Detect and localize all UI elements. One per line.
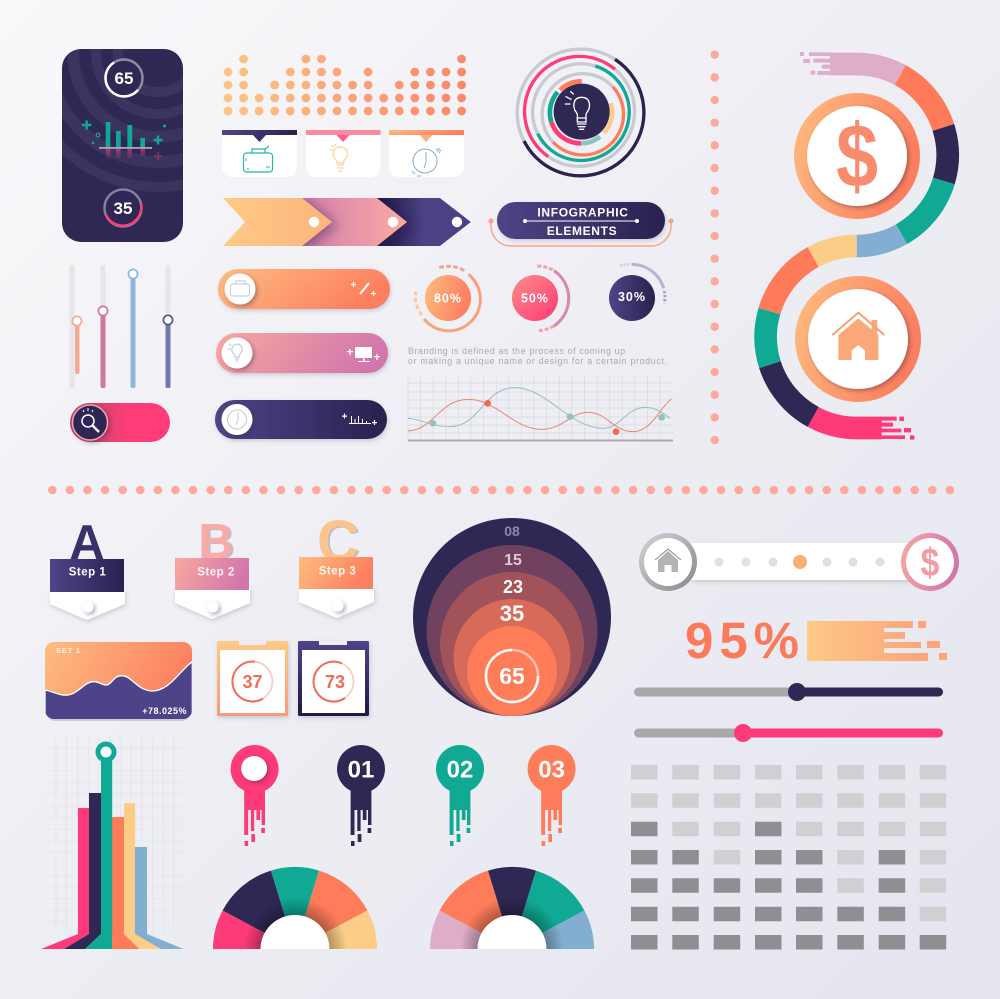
title pill: infographic elements: ELEMENTS bbox=[547, 224, 617, 238]
title pill: infographic elements: INFOGRAPHIC bbox=[537, 206, 629, 220]
icon: dollar badge: $ bbox=[921, 540, 940, 585]
clipboard: 73: 73 bbox=[325, 672, 345, 692]
icon: monitor with sparkles bbox=[347, 347, 380, 362]
semicircle gauge: right bbox=[430, 867, 594, 949]
bar chart with grid and ringed teal bar bbox=[41, 737, 184, 949]
gauge: 50%: 50% bbox=[521, 292, 549, 306]
step card A: A bbox=[69, 516, 105, 570]
gauge: 30%: 30% bbox=[618, 290, 646, 304]
tab card: briefcase bbox=[222, 130, 297, 177]
house medallion bbox=[795, 276, 921, 402]
gauge: 50% bbox=[512, 266, 569, 331]
bar with speed lines bbox=[807, 621, 928, 661]
nested circles chart: 23 bbox=[503, 577, 523, 597]
semicircle gauge: left bbox=[213, 867, 377, 949]
drip pin: 01: 01 bbox=[348, 756, 374, 784]
wave area card bbox=[45, 642, 192, 721]
nested circles chart bbox=[413, 518, 611, 716]
wave area card: SET 1 bbox=[56, 646, 81, 655]
nested circles chart: 65 bbox=[499, 663, 525, 689]
pill button: pink bbox=[216, 333, 388, 373]
drip pin: 01 bbox=[337, 745, 385, 846]
icon: lightbulb bbox=[565, 92, 590, 129]
big stat: 95%: 95% bbox=[685, 612, 799, 669]
panel: phone card with 65 and 35 bbox=[62, 49, 183, 242]
vertical dotted divider bbox=[711, 55, 719, 441]
drip pin: 03 bbox=[528, 745, 576, 846]
icon: clock bbox=[412, 148, 441, 176]
icon: magnifier bbox=[82, 408, 99, 432]
text block: branding description: Branding is defined as the process of coming up bbox=[408, 346, 625, 356]
nested circles chart: 08 bbox=[504, 523, 520, 539]
tab card: clock bbox=[389, 130, 464, 177]
icon: dollar badge bbox=[901, 533, 959, 591]
tab card: lightbulb bbox=[306, 130, 380, 177]
step card B bbox=[175, 515, 250, 619]
horizontal dotted divider bbox=[52, 486, 950, 494]
s-shaped segmented path bbox=[766, 52, 948, 440]
icon: clock bbox=[228, 410, 246, 429]
range slider: navy bbox=[634, 683, 943, 701]
ring: 65 bbox=[106, 60, 142, 96]
speed lines: bottom bbox=[881, 417, 914, 440]
wave area card: +78.025% bbox=[142, 706, 187, 716]
drip pin: 02: 02 bbox=[447, 756, 473, 784]
icon: wand with sparkles bbox=[351, 282, 376, 296]
step card B: B bbox=[198, 515, 234, 569]
line chart with grid bbox=[408, 375, 673, 442]
pill button: navy bbox=[215, 400, 387, 439]
step card C: Step 3 bbox=[319, 566, 356, 578]
nested circles chart: 15 bbox=[504, 552, 522, 569]
chart: teal bars with reflection bbox=[82, 120, 166, 160]
clipboard: 73 bbox=[298, 641, 369, 716]
dollar medallion: $ bbox=[836, 106, 878, 206]
nested circles chart: 35 bbox=[500, 601, 524, 626]
icon: house bbox=[832, 313, 884, 360]
step card C: C bbox=[317, 509, 359, 574]
vertical sliders bbox=[72, 265, 173, 388]
ring: 35: 35 bbox=[114, 199, 132, 218]
gauge: 80%: 80% bbox=[434, 292, 462, 306]
toggle with magnifier bbox=[70, 403, 170, 442]
step card B: Step 2 bbox=[197, 566, 235, 578]
step card A: Step 1 bbox=[69, 566, 106, 578]
dot column chart bbox=[228, 58, 462, 111]
icon: lightbulb bbox=[329, 144, 347, 171]
arrow banner bbox=[223, 198, 471, 246]
range slider: pink bbox=[634, 724, 943, 742]
drip pin: blank bbox=[231, 745, 279, 846]
stepper: house to dollar bbox=[639, 533, 959, 591]
step card A bbox=[50, 516, 125, 620]
text block: branding description: or making a unique name or design for a certain product. bbox=[408, 356, 667, 366]
speed lines: top bbox=[800, 52, 831, 75]
clipboard: 37 bbox=[217, 641, 288, 716]
icon: lightbulb bbox=[228, 344, 242, 361]
drip pin: 02 bbox=[436, 745, 484, 846]
gauge: 30% bbox=[609, 264, 665, 321]
icon: bars with sparkles bbox=[342, 414, 377, 425]
dollar medallion bbox=[794, 93, 920, 219]
gauge: 80% bbox=[415, 266, 480, 331]
drip pin: 03: 03 bbox=[538, 756, 565, 784]
gray block matrix bbox=[631, 765, 946, 950]
pill button: orange bbox=[218, 269, 390, 309]
icon: briefcase bbox=[230, 281, 250, 296]
step card C bbox=[299, 509, 374, 618]
icon: house badge bbox=[639, 533, 697, 591]
big stat: 95% bbox=[685, 612, 947, 669]
ring: 65: 65 bbox=[115, 69, 133, 88]
concentric ring chart with lightbulb bbox=[517, 49, 644, 176]
icon: briefcase bbox=[244, 146, 272, 172]
title pill: infographic elements bbox=[488, 202, 674, 246]
ring: 35 bbox=[104, 190, 142, 226]
clipboard: 37: 37 bbox=[242, 672, 263, 692]
text block: branding description bbox=[408, 346, 667, 366]
